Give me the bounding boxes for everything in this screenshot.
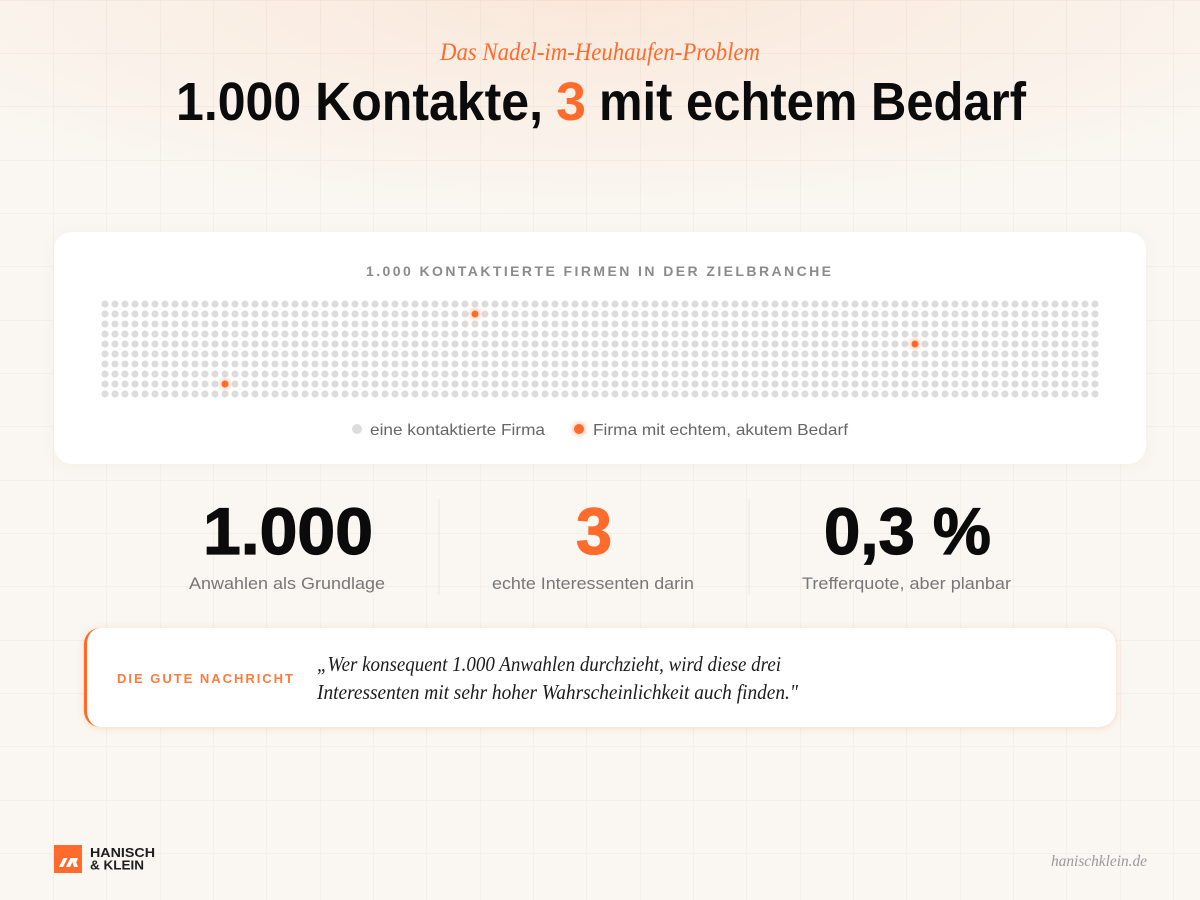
callout: good news [84,628,1116,727]
callout label: DIE GUTE NACHRICHT [117,671,293,686]
panel: dot matrix card [54,232,1146,464]
panel heading: 1.000 KONTAKTIERTE FIRMEN IN DER ZIELBRANCHE [366,263,831,279]
quote: Interessenten mit sehr hoher Wahrscheinlichkeit auch finden." [316,680,798,704]
icon: logo mark [54,845,82,873]
title: 1.000 Kontakte, [176,72,543,132]
title: 3 [556,72,586,132]
title: mit echtem Bedarf [599,72,1027,132]
quote [316,652,798,704]
logo: Hanisch & Klein: HANISCH [90,846,155,860]
logo: Hanisch & Klein [54,845,155,873]
quote: „Wer konsequent 1.000 Anwahlen durchzieht, wird diese drei [317,652,781,676]
dot grid: 1000 companies with 3 highlighted [105,304,1096,394]
stat: 0,3 % [802,494,1011,593]
legend [352,422,849,439]
website url: hanischklein.de [1051,853,1147,870]
stat: 1.000 [189,494,385,593]
legend: eine kontaktierte Firma [370,422,545,439]
stat: 1.000: 1.000 [203,494,373,568]
stat: 3: echte Interessenten darin [492,574,694,593]
subtitle: Das Nadel-im-Heuhaufen-Problem [439,39,760,66]
logo: Hanisch & Klein: & KLEIN [90,858,144,872]
legend: Firma mit echtem, akutem Bedarf [593,422,849,439]
stat: 1.000: Anwahlen als Grundlage [189,574,385,593]
title [176,72,1027,132]
stat: 0,3 %: 0,3 % [824,494,991,568]
stat: 0,3 %: Trefferquote, aber planbar [802,574,1011,593]
stat: 3: 3 [576,494,612,568]
stat: 3 [492,494,694,593]
